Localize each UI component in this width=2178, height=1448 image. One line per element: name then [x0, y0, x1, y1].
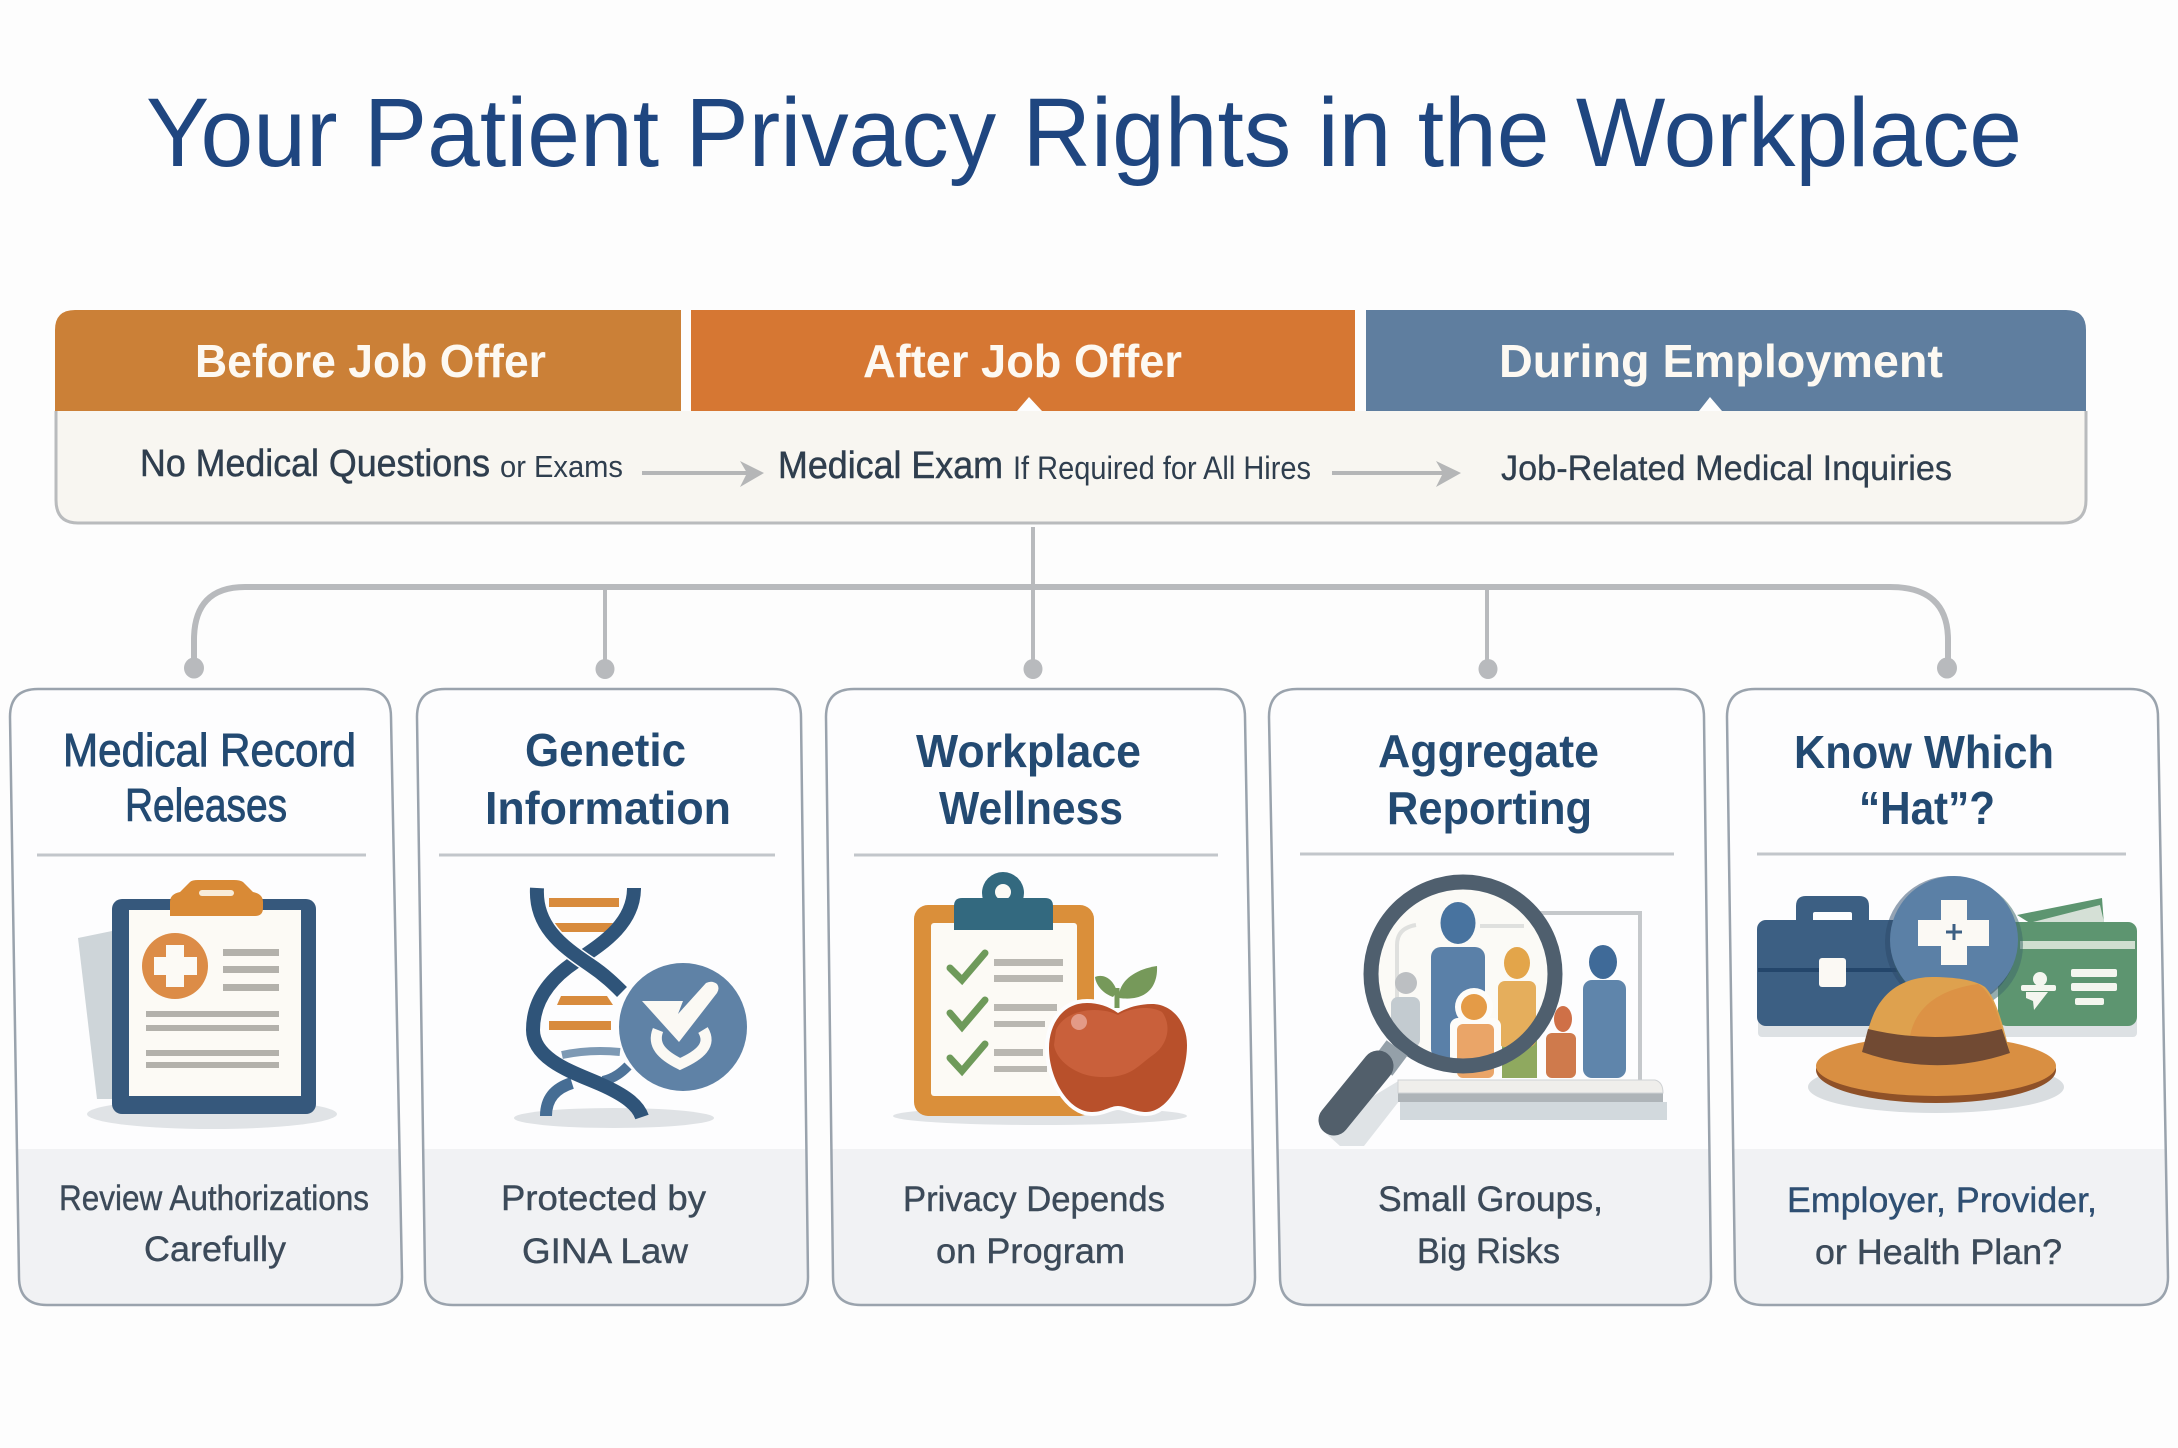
- heading: Know Which: [1794, 726, 2054, 778]
- heading: Genetic: [525, 724, 686, 776]
- caption: [59, 1179, 369, 1269]
- icon: medical clipboard: [78, 880, 337, 1129]
- caption: [501, 1179, 707, 1271]
- caption: [1787, 1181, 2097, 1272]
- header: during employment: [1366, 310, 2086, 411]
- person: right blue: [1583, 945, 1626, 1078]
- heading: Workplace: [916, 725, 1141, 777]
- panel: aggregate reporting: [1269, 689, 1711, 1305]
- caption: Employer, Provider,: [1787, 1181, 2097, 1220]
- step text: if required: If Required for All Hires: [1013, 450, 1311, 486]
- heading: Aggregate: [1378, 725, 1599, 777]
- caption: Small Groups,: [1378, 1180, 1603, 1219]
- heading: [63, 724, 356, 831]
- heading: Information: [485, 782, 731, 834]
- caption: [1378, 1180, 1603, 1271]
- heading: [485, 724, 731, 834]
- panel: workplace wellness: [826, 689, 1255, 1305]
- heading: Medical Record: [63, 724, 356, 776]
- caption: Protected by: [501, 1179, 707, 1218]
- caption: Privacy Depends: [903, 1180, 1165, 1219]
- caption: Review Authorizations: [59, 1179, 369, 1218]
- title: Your Patient Privacy Rights in the Workplace: [146, 78, 2022, 187]
- header: after job offer: [691, 310, 1355, 411]
- person: gray: [1391, 972, 1420, 1047]
- person: tall orange: [1498, 947, 1537, 1078]
- heading: [1378, 725, 1599, 834]
- caption: [903, 1180, 1165, 1271]
- caption: GINA Law: [522, 1232, 689, 1271]
- step text: or exams: or Exams: [500, 449, 623, 484]
- icon: magnifier over people bars: [1320, 881, 1667, 1146]
- header: before job offer: Before Job Offer: [195, 335, 546, 387]
- banner body: [56, 411, 2086, 523]
- person: rust: [1546, 1006, 1576, 1078]
- heading: Releases: [125, 779, 287, 831]
- header: during employment: During Employment: [1499, 335, 1943, 387]
- heading: Reporting: [1387, 782, 1592, 834]
- arrow 2: [1332, 461, 1461, 487]
- panel: know which hat: [1727, 689, 2168, 1305]
- step text: medical exam: Medical Exam: [778, 445, 1003, 487]
- caption: or Health Plan?: [1815, 1233, 2062, 1272]
- heading: [916, 725, 1141, 834]
- icon: briefcase, medical badge, insurance card and hat: [1757, 876, 2137, 1113]
- heading: Wellness: [939, 782, 1123, 834]
- connector tree: [184, 527, 1957, 679]
- panel: genetic information: [417, 689, 808, 1305]
- heading: [1794, 726, 2054, 834]
- caption: Big Risks: [1417, 1232, 1560, 1271]
- arrow 1: [642, 461, 764, 487]
- header: before job offer: [55, 310, 681, 411]
- step text: no medical questions: No Medical Questions: [140, 443, 490, 485]
- person: large blue: [1431, 902, 1485, 1059]
- header: after job offer: After Job Offer: [863, 335, 1182, 387]
- panel: employment timeline banner: [55, 310, 2086, 523]
- caption: on Program: [936, 1232, 1125, 1271]
- icon: DNA helix with check badge: [514, 888, 749, 1128]
- heading: “Hat”?: [1859, 782, 1995, 834]
- caption: Carefully: [144, 1230, 287, 1269]
- step text: job-related: Job-Related Medical Inquiries: [1501, 449, 1952, 488]
- panel: medical record releases: [10, 689, 402, 1305]
- person: small orange: [1450, 988, 1501, 1078]
- icon: checklist clipboard and apple: [893, 872, 1187, 1125]
